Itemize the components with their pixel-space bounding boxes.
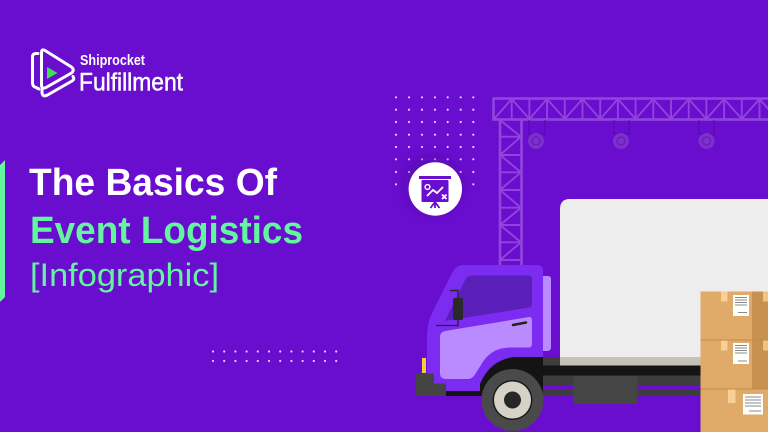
icon: green play triangle (47, 67, 58, 79)
wheel arch (480, 357, 543, 396)
truck side tank (573, 376, 637, 404)
subtitle: [Infographic]: [Infographic] (30, 257, 219, 293)
title (29, 162, 303, 293)
icon: logo play triangles (32, 50, 74, 96)
indicator light (422, 358, 426, 373)
cardboard boxes (700, 292, 768, 432)
icon: presentation board badge (405, 157, 462, 216)
box 2 (700, 340, 768, 389)
logo: Shiprocket Fulfillment (32, 50, 183, 96)
truck body floor strip (543, 357, 768, 366)
front bumper (416, 374, 446, 396)
truck chassis (543, 366, 768, 396)
box 1 (700, 292, 768, 340)
front wheel (482, 369, 544, 431)
truck cab (427, 265, 543, 391)
truss: vertical tower (500, 120, 522, 266)
title line: The Basics Of: The Basics Of (29, 162, 277, 204)
logo word: Fulfillment: Fulfillment (79, 68, 183, 96)
cab window (445, 276, 532, 321)
truck (416, 199, 768, 431)
light 3 (698, 120, 714, 149)
logo word: Shiprocket: Shiprocket (80, 53, 145, 69)
box 3 (700, 390, 768, 432)
side mirror (436, 290, 463, 326)
accent bar (0, 160, 5, 302)
door handle (513, 322, 526, 325)
dot grid: upper centre (395, 96, 474, 185)
cab door panel (440, 317, 532, 379)
truck cargo body (560, 199, 768, 358)
light 2 (613, 120, 629, 149)
title line: Event Logistics: Event Logistics (30, 210, 303, 252)
truss: horizontal beam (494, 98, 768, 120)
light 1 (528, 120, 545, 149)
dot grid: lower left (212, 350, 337, 362)
cab rear panel (543, 276, 551, 351)
stage lights (528, 120, 714, 149)
